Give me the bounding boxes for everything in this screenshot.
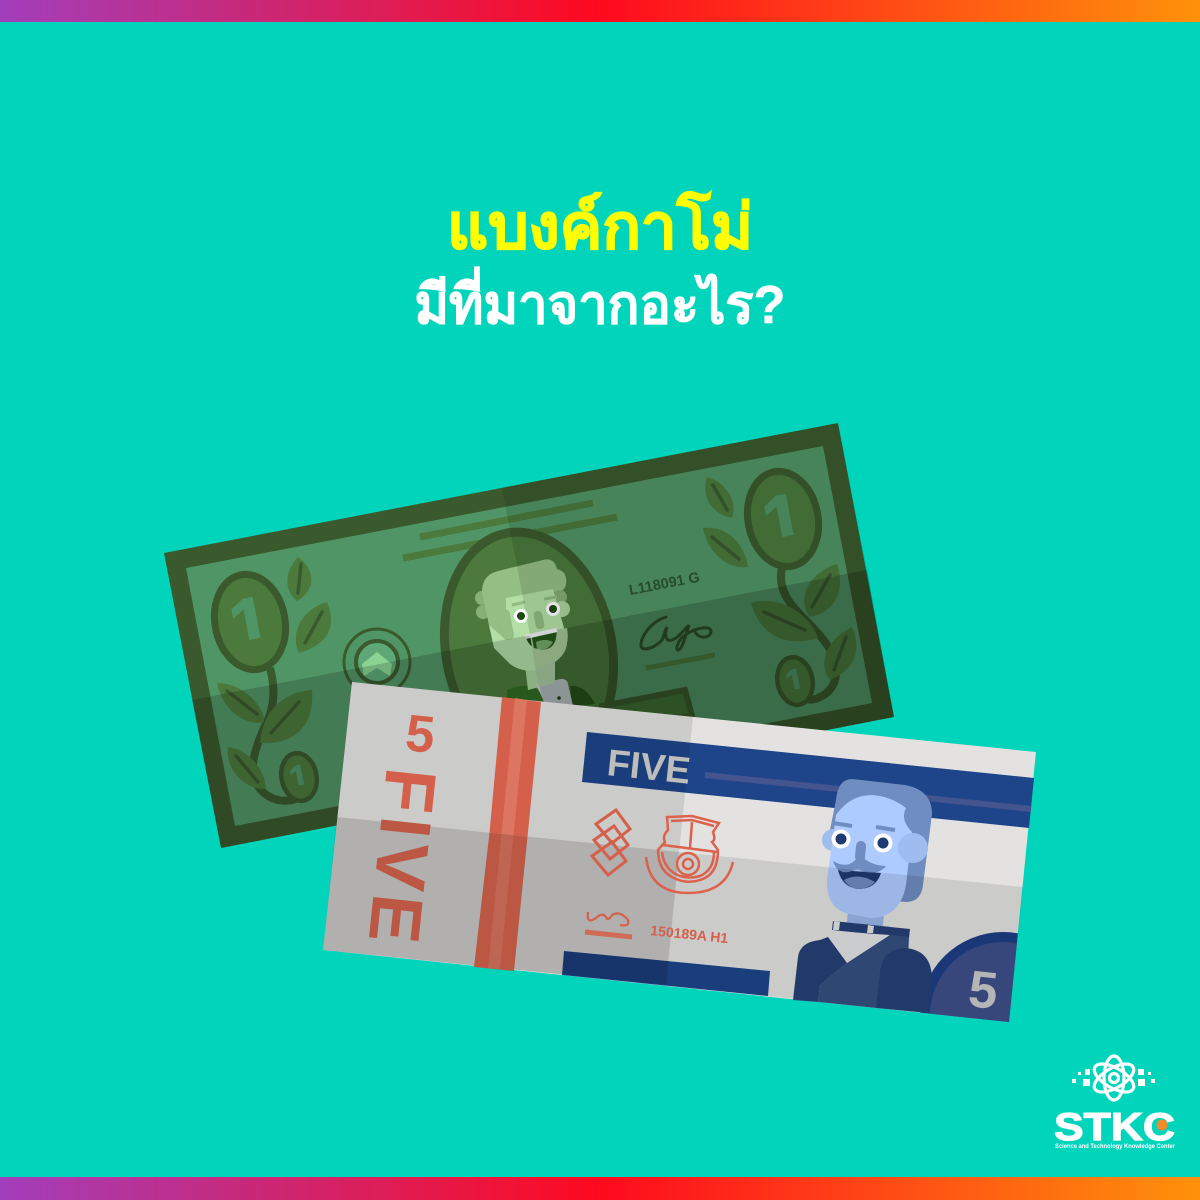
left ear xyxy=(822,829,844,851)
neck lower-right shade xyxy=(535,660,555,687)
coin numeral: 5 xyxy=(966,960,1001,1021)
header lines xyxy=(403,503,617,558)
left large coin xyxy=(210,570,290,674)
word FIVE: FIVE xyxy=(605,741,692,792)
title line 1: แบงค์กาโม่ xyxy=(447,190,753,262)
title xyxy=(414,190,786,335)
right leaf ribs xyxy=(712,485,846,670)
fold shading bottom-left xyxy=(192,635,558,848)
right curl and ear xyxy=(553,590,567,604)
white five banknote xyxy=(323,682,1036,1022)
right stem xyxy=(781,568,836,700)
signature xyxy=(641,617,711,650)
green one-dollar banknote xyxy=(164,423,894,848)
neck xyxy=(846,912,884,934)
blue bottom ribbon xyxy=(562,951,770,996)
red band upper xyxy=(490,697,541,837)
shirt xyxy=(535,679,573,706)
logo tagline: Science and Technology Knowledge Center xyxy=(1055,1144,1176,1150)
green portrait xyxy=(475,559,595,706)
bottom gradient bar xyxy=(0,1177,1200,1200)
nose xyxy=(860,846,861,857)
note border xyxy=(164,423,894,848)
tongue xyxy=(844,876,875,889)
teeth lower-right xyxy=(530,630,557,636)
round emblem xyxy=(344,629,410,695)
orange dot xyxy=(1156,1120,1168,1130)
diamond icon xyxy=(592,810,630,875)
signature underline xyxy=(585,932,632,937)
fold shading bottom-right xyxy=(530,570,894,782)
fold shading bottom-left xyxy=(323,817,679,985)
right leaves xyxy=(703,477,856,680)
hair curls left xyxy=(475,591,490,619)
serial number: L118091 G xyxy=(628,570,701,599)
top gradient bar xyxy=(0,0,1200,22)
blue portrait xyxy=(793,779,932,1013)
face xyxy=(489,589,567,671)
mouth lower-right xyxy=(531,629,557,650)
note face xyxy=(186,446,872,826)
left leaves xyxy=(217,557,331,789)
shirt xyxy=(828,931,890,963)
left leaf ribs xyxy=(227,564,322,782)
mouth xyxy=(526,632,557,650)
ribbon line xyxy=(705,775,1031,809)
blue top ribbon xyxy=(582,732,1034,828)
hair xyxy=(830,779,932,902)
pixel dots xyxy=(1072,1069,1155,1086)
right ear xyxy=(898,833,928,863)
serial number: 150189A H1 xyxy=(650,922,729,946)
vertical word FIVE: FIVE xyxy=(352,764,451,952)
collar tips xyxy=(833,921,874,933)
brows xyxy=(833,823,895,830)
left small coin: 1 xyxy=(286,757,312,799)
right sleeve xyxy=(876,948,932,1013)
tongue xyxy=(532,641,553,650)
note signature xyxy=(588,912,628,925)
atom icon xyxy=(1090,1056,1138,1100)
tongue lower-right xyxy=(536,640,553,650)
numeral 5: 5 xyxy=(403,704,438,765)
moustache xyxy=(833,858,886,873)
side hair strip xyxy=(498,609,515,641)
fold shading bottom-right xyxy=(666,852,1023,1022)
STKC logo xyxy=(1054,1056,1176,1150)
crest icon xyxy=(646,816,733,893)
eyes xyxy=(832,830,850,848)
portrait oval xyxy=(425,517,633,783)
note base xyxy=(323,682,1036,1022)
coin xyxy=(920,932,1018,1022)
eyes xyxy=(514,609,528,623)
fold shading top-right xyxy=(502,423,867,635)
shirt button xyxy=(557,696,561,700)
signature underline xyxy=(646,655,715,668)
hair xyxy=(482,559,566,640)
right small coin: 1 xyxy=(782,661,808,703)
band highlight lower xyxy=(488,834,514,969)
teeth xyxy=(525,630,557,637)
fold shading top-left xyxy=(337,682,693,852)
right large coin: 1 xyxy=(756,478,811,564)
brows xyxy=(512,597,557,605)
face lower-right shade xyxy=(530,628,568,671)
seal frame peeking out xyxy=(602,690,692,725)
jacket xyxy=(818,935,909,1008)
left stem xyxy=(253,668,302,801)
left large coin: 1 xyxy=(223,581,278,667)
left sleeve xyxy=(793,937,847,1002)
wordmark: STKC xyxy=(1054,1106,1175,1149)
right vine xyxy=(703,465,856,708)
left vine xyxy=(207,557,331,804)
band highlight upper xyxy=(502,698,527,835)
nose xyxy=(538,615,540,625)
shoulders xyxy=(507,686,548,705)
mouth xyxy=(838,870,881,889)
right large coin xyxy=(744,468,822,570)
face xyxy=(827,795,912,918)
right small coin xyxy=(773,654,817,708)
left small coin xyxy=(277,750,321,804)
title line 2: มีที่มาจากอะไร? xyxy=(414,266,786,335)
collar band xyxy=(832,921,910,938)
red band lower xyxy=(474,833,528,971)
neck xyxy=(525,660,555,690)
